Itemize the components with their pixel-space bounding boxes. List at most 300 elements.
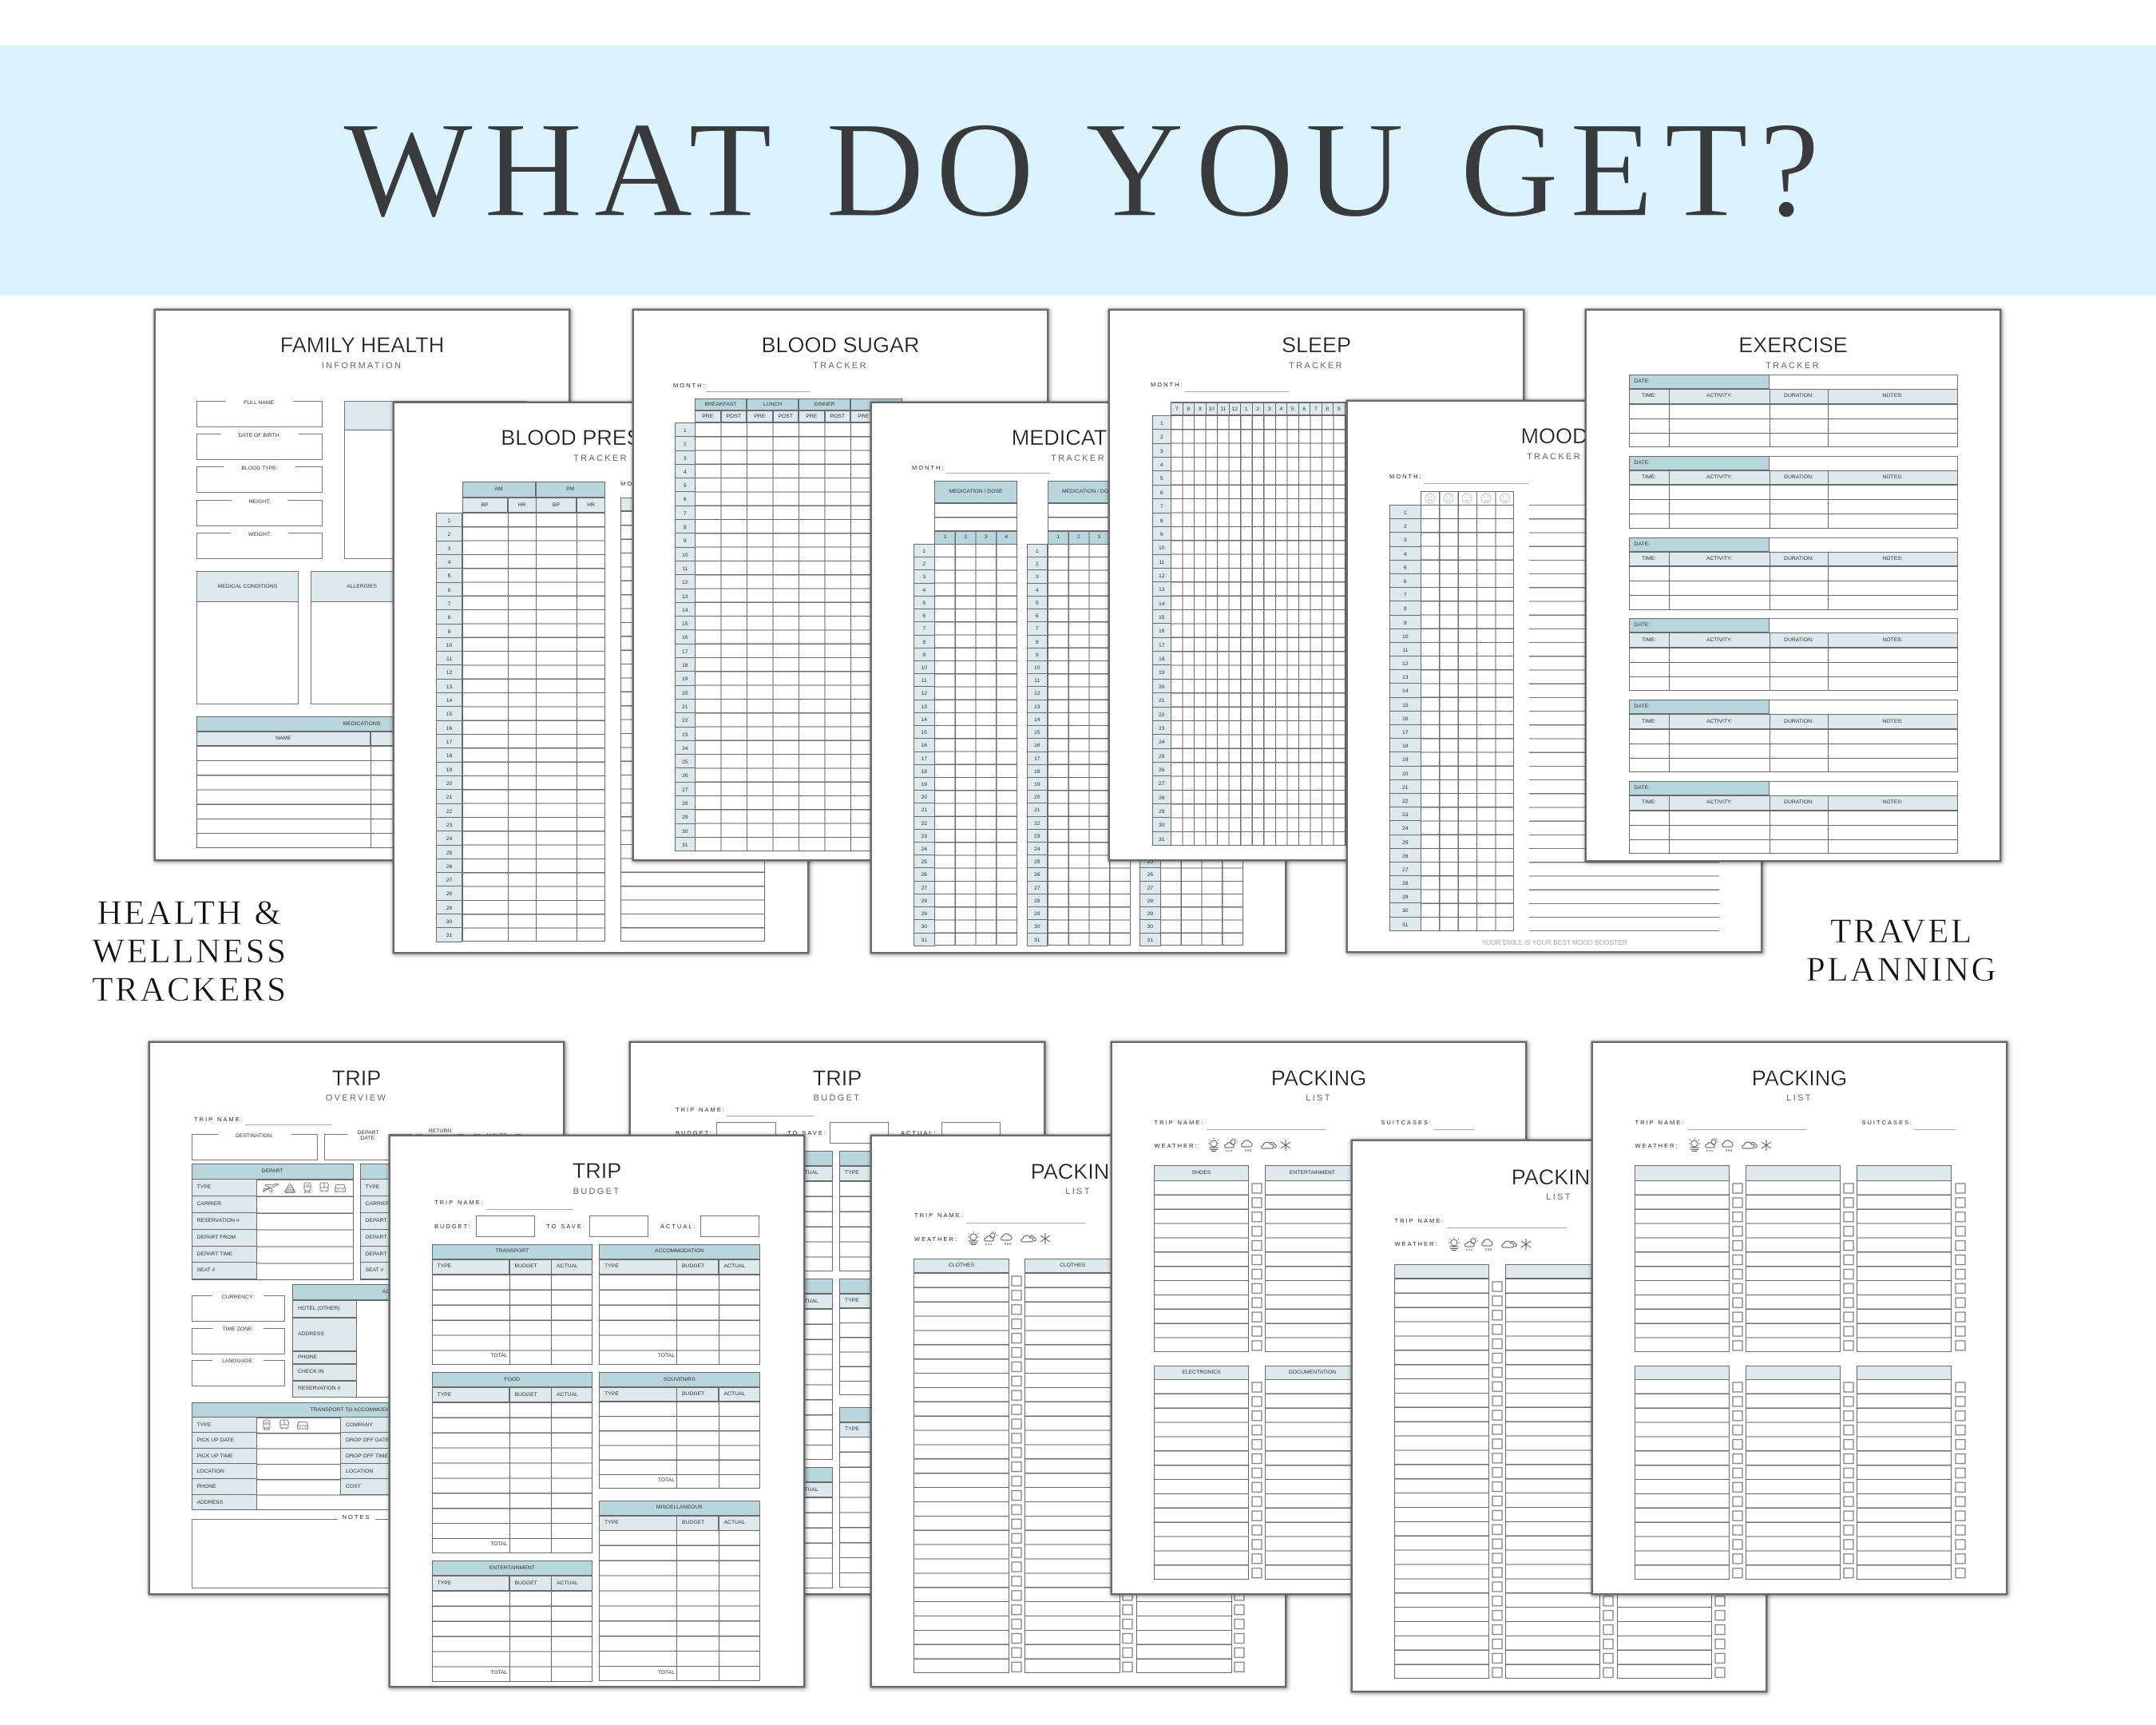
heading: TRIP — [332, 1066, 381, 1090]
label: trip name: TRIP NAME: — [1155, 1119, 1204, 1126]
footer quote: YOUR SMILE IS YOUR BEST MOOD BOOSTER — [1481, 938, 1627, 946]
table: entertainment: TOTAL — [490, 1670, 508, 1675]
table: food — [677, 1279, 833, 1460]
field: height: HEIGHT: — [249, 498, 270, 505]
table: transport: TOTAL — [490, 1353, 508, 1358]
table: sleep grid: 5 — [1291, 406, 1294, 412]
table: blood pressure log: 29 — [446, 906, 452, 911]
table: medication block 2: 26 — [1034, 872, 1040, 878]
table: medication block 1: 3 — [985, 534, 988, 540]
table: transport: TYPE — [677, 1170, 692, 1176]
panel: packing list blank long — [1353, 1141, 1766, 1691]
table: exercise block 4: TIME: — [1642, 637, 1656, 643]
table: miscellaneous: TYPE — [604, 1520, 619, 1525]
table: blood pressure log: 9 — [448, 629, 450, 634]
subheading: INFORMATION — [322, 361, 402, 371]
table: transport to accommodation: COMPANY — [346, 1422, 373, 1428]
subheading: TRACKER — [813, 361, 868, 371]
table: blood sugar log: 30 — [682, 829, 688, 835]
table: medication block 2: 21 — [1034, 807, 1040, 813]
field: depart date: DATE: — [360, 1136, 376, 1141]
table: exercise block 1 — [1629, 375, 1958, 447]
table: blood sugar log: 19 — [682, 676, 688, 682]
table: miscellaneous: MISCELLANEOUS — [897, 1411, 943, 1417]
table: medication block 3: 4 — [1231, 534, 1234, 540]
table: mood grid: 28 — [1402, 881, 1409, 886]
table: souvenirs: ACTUAL — [965, 1298, 985, 1303]
table: medication block 2: 22 — [1034, 821, 1040, 827]
table: medication block 3: 31 — [1147, 938, 1153, 943]
table: blood pressure log: PM — [566, 486, 574, 492]
table: sleep grid: 28 — [1159, 795, 1165, 801]
table: souvenirs: SOUVENIRS — [664, 1377, 696, 1382]
side label: health and wellness trackers: WELLNESS — [92, 933, 288, 970]
table: blood sugar log: 23 — [682, 732, 688, 738]
list: documentation — [1265, 1366, 1373, 1580]
table: return: SEAT # — [366, 1267, 383, 1273]
table: accommodation: ACCOMMODATION — [382, 1289, 431, 1295]
table: medication block 2: 3 — [1036, 574, 1039, 580]
table: blood sugar log: 16 — [682, 635, 688, 640]
table: sleep grid: 6 — [1302, 406, 1306, 412]
field: destination: DESTINATION: — [236, 1132, 273, 1139]
table: blood sugar log: 15 — [682, 621, 688, 627]
table: sleep grid: 22 — [1159, 712, 1165, 718]
table: medication block 3: 17 — [1147, 755, 1153, 762]
table: souvenirs: TYPE — [604, 1391, 619, 1397]
table: mood grid: 16 — [1402, 716, 1409, 722]
label: to save: TO SAVE: — [546, 1222, 586, 1230]
table: medication block 2: 27 — [1034, 886, 1040, 891]
list: top column 2 — [1746, 1165, 1853, 1352]
panel: blood pressure tracker — [394, 403, 807, 952]
table: medications: MEDICATIONS — [343, 721, 380, 727]
table: accommodation: PHONE — [298, 1354, 317, 1360]
table: souvenirs: TOTAL — [658, 1477, 675, 1483]
table: transport to accommodation: LOCATION — [196, 1469, 224, 1474]
table: transport to accommodation: DROP OFF TIME — [346, 1453, 388, 1459]
table: sleep grid: 7 — [1160, 504, 1163, 510]
table: mood grid: 12 — [1402, 661, 1409, 667]
table: transport to accommodation: TYPE — [196, 1422, 211, 1428]
table: return: CARRIER — [366, 1201, 390, 1207]
table: blood sugar log — [675, 399, 902, 851]
table: food: TYPE — [438, 1392, 451, 1398]
label: month: MONTH: — [912, 464, 945, 471]
table: blood pressure log: 16 — [446, 726, 452, 732]
table: blood sugar log: 12 — [682, 580, 688, 585]
table: medication block 2: 14 — [1034, 717, 1040, 723]
table: medication block 1: 13 — [921, 704, 927, 710]
suitcases underline — [1433, 1129, 1475, 1130]
table: medication block 3: 9 — [1148, 652, 1151, 658]
table: blood sugar log: 18 — [682, 663, 688, 668]
list: bottom column 1 — [1635, 1366, 1742, 1580]
table: blood sugar log: 31 — [682, 843, 688, 848]
table: blood sugar log: 21 — [682, 704, 688, 710]
trip name underline — [1447, 1227, 1567, 1228]
table: blood sugar log: POST — [778, 414, 793, 419]
table: medication block 1: 17 — [921, 755, 927, 762]
icons: weather — [968, 1231, 1051, 1245]
subheading: LIST — [1786, 1093, 1813, 1103]
list column 2: CLOTHES — [1060, 1263, 1085, 1268]
table: blood sugar log: 25 — [682, 759, 688, 765]
box: to save — [589, 1215, 648, 1237]
table: souvenirs — [839, 1279, 985, 1395]
table: return: DEPART TIME — [366, 1251, 401, 1257]
table: exercise block 4 — [1629, 618, 1958, 691]
table: medication block 3: 1 — [1170, 534, 1173, 540]
table: blood pressure log: 3 — [448, 546, 450, 552]
table: transport to accommodation: PICK UP TIME — [196, 1453, 233, 1459]
table: sleep grid: 27 — [1159, 781, 1165, 787]
field: time zone: TIME ZONE: — [223, 1326, 253, 1332]
table: sleep grid: 7 — [1175, 406, 1179, 412]
table: medication block 2: 2 — [1036, 561, 1039, 567]
table: mood grid: 15 — [1402, 703, 1409, 708]
table: transport: TRANSPORT — [495, 1248, 529, 1254]
field: return — [416, 1134, 464, 1160]
table: medication block 2 — [1027, 481, 1131, 946]
table: medication block 1: 22 — [921, 821, 927, 827]
table: entertainment: BUDGET — [514, 1580, 537, 1586]
list: electronics — [1154, 1366, 1262, 1580]
table: sleep grid: 24 — [1159, 740, 1165, 745]
table: medication block 2: 4 — [1118, 534, 1121, 540]
field: language: LANGUAGE: — [222, 1358, 254, 1364]
table: entertainment: BUDGET — [755, 1487, 778, 1493]
panel: trip budget (front) — [390, 1136, 803, 1686]
field: date of birth — [196, 434, 323, 460]
table: blood sugar log: 27 — [682, 787, 688, 793]
table: depart: CARRIER — [196, 1201, 221, 1207]
table: medication block 2: 23 — [1034, 834, 1040, 839]
table: exercise block 4: ACTIVITY: — [1706, 637, 1732, 643]
table: miscellaneous: ACTUAL — [965, 1426, 985, 1432]
table: return: TYPE — [366, 1184, 379, 1190]
table: sleep grid: 8 — [1187, 406, 1190, 412]
table: sleep grid: 21 — [1159, 698, 1165, 704]
panel: exercise tracker — [1587, 311, 1999, 860]
table: accommodation: ACCOMMODATION — [895, 1155, 944, 1160]
label: trip name: TRIP NAME: — [194, 1116, 244, 1123]
table: transport — [677, 1151, 833, 1271]
table: blood pressure log: 2 — [448, 532, 450, 537]
table: blood sugar log: 14 — [682, 608, 688, 613]
table: transport: TOTAL — [731, 1259, 747, 1265]
label: month: MONTH: — [1151, 381, 1184, 388]
field: destination — [192, 1134, 318, 1160]
table: mood grid: 13 — [1402, 675, 1409, 680]
table: medication block 2: 19 — [1034, 782, 1040, 787]
table: medication block 2: 20 — [1034, 795, 1040, 800]
table: medication block 1: 2 — [964, 534, 967, 540]
table: blood sugar log: 13 — [682, 594, 688, 600]
table: exercise block 3: TIME: — [1642, 556, 1656, 561]
table: accommodation — [839, 1151, 985, 1271]
field: language — [192, 1359, 284, 1386]
month underline — [946, 473, 1050, 474]
panel: packing list categories — [1112, 1043, 1525, 1593]
table: medication block 3: 2 — [1190, 534, 1193, 540]
panel: trip overview: RETURN — [429, 1128, 451, 1134]
panel: packing list blank sections — [1593, 1043, 2006, 1593]
table: exercise block 6 — [1629, 781, 1958, 854]
box: allergies: ALLERGIES — [347, 584, 377, 589]
table: blood pressure log: AM — [494, 486, 503, 492]
table: blood sugar log: 5 — [684, 483, 687, 489]
table: blood pressure log: 14 — [446, 698, 452, 704]
heading: MEDICATION — [1012, 426, 1145, 450]
table: transport to accommodation: COST — [346, 1484, 361, 1489]
table: miscellaneous: ACTUAL — [723, 1520, 745, 1525]
table: exercise block 3: NOTES: — [1882, 556, 1903, 561]
panel: blood sugar tracker — [634, 311, 1047, 859]
table: medication block 2: 25 — [1034, 859, 1040, 865]
table: mood grid: 21 — [1402, 785, 1409, 791]
table: medication block 2: 15 — [1034, 730, 1040, 736]
box: notes — [192, 1519, 522, 1588]
table: medication block 1: 29 — [921, 911, 927, 917]
table: blood sugar log: POST — [830, 414, 845, 419]
table: medication block 2: 28 — [1034, 898, 1040, 904]
label: weather: WEATHER: — [914, 1235, 958, 1243]
table: exercise block 1: DATE: — [1634, 379, 1650, 384]
table: medication block 1: 21 — [921, 807, 927, 813]
table: blood pressure log: 17 — [446, 740, 452, 745]
panel: trip overview: DEPART — [358, 1130, 378, 1136]
table: transport: TRANSPORT — [735, 1155, 769, 1160]
table: mood grid: 25 — [1402, 840, 1409, 845]
table: blood pressure log: 6 — [448, 588, 450, 593]
table: food: FOOD — [504, 1377, 520, 1382]
table: blood pressure log: 31 — [446, 933, 452, 938]
table: medication block 3: 18 — [1147, 769, 1153, 775]
table: medication block 2: 12 — [1034, 691, 1040, 696]
table: medication block 1: 20 — [921, 795, 927, 800]
side label: health and wellness trackers: HEALTH & — [97, 894, 283, 932]
table: blood pressure log: 1 — [448, 518, 450, 524]
table: accommodation: BUDGET — [922, 1170, 945, 1176]
table: sleep grid: 12 — [1159, 573, 1165, 579]
table: medication block 3: 7 — [1148, 626, 1151, 632]
table: accommodation: TOTAL — [898, 1259, 915, 1265]
table: medication block 3: MEDICATION / DOSE — [1175, 489, 1229, 494]
icons: weather — [1447, 1236, 1535, 1252]
table: sleep grid: 19 — [1159, 670, 1165, 676]
subheading: TRACKER — [1766, 361, 1821, 371]
side label: travel planning — [1806, 913, 1998, 989]
table: accommodation — [292, 1284, 431, 1398]
table: miscellaneous — [839, 1407, 985, 1588]
box: actual — [700, 1215, 759, 1237]
table: blood sugar log: LUNCH — [763, 402, 782, 407]
table: mood grid: 8 — [1404, 606, 1407, 612]
table: exercise block 2: ACTIVITY: — [1706, 474, 1732, 480]
table: medication block 2: 24 — [1034, 847, 1040, 852]
table: food: ACTUAL — [557, 1392, 578, 1398]
table: medication block 3: 27 — [1147, 886, 1153, 891]
table: medication block 1: 27 — [921, 886, 927, 891]
table: mood grid: 26 — [1402, 854, 1409, 859]
table: sleep grid: 7 — [1314, 406, 1318, 412]
table: mood grid: 9 — [1404, 620, 1407, 626]
table: sleep grid: 10 — [1208, 406, 1215, 412]
table: exercise block 5: NOTES: — [1882, 719, 1903, 724]
table: blood pressure log: 11 — [446, 656, 452, 662]
table: exercise block 2 — [1629, 456, 1958, 529]
table: blood pressure log: 7 — [448, 601, 450, 607]
table: blood sugar log: 20 — [682, 691, 688, 696]
subheading: LIST — [1306, 1093, 1332, 1103]
table: entertainment: ACTUAL — [797, 1487, 818, 1493]
table: medication block 3: 4 — [1148, 588, 1151, 593]
table: transport: ACTUAL — [557, 1263, 578, 1269]
table: exercise block 3: DURATION: — [1784, 556, 1813, 561]
table: medication block 3: 24 — [1147, 847, 1153, 852]
table: medication block 3: 3 — [1211, 534, 1214, 540]
table: sleep grid: 2 — [1395, 406, 1398, 412]
box: medical conditions — [196, 571, 299, 704]
table: sleep grid: 4 — [1279, 406, 1282, 412]
label: trip name: TRIP NAME: — [914, 1211, 965, 1219]
table: blood sugar log: PRE — [702, 414, 713, 419]
table: medication block 2: 3 — [1097, 534, 1100, 540]
icons: transport types — [262, 1182, 346, 1193]
table: blood pressure log: HR — [587, 502, 595, 508]
table: medication block 1: 12 — [921, 691, 927, 696]
table: depart: DEPART TIME — [196, 1251, 232, 1257]
panel: trip budget (back) — [631, 1043, 1044, 1593]
list: entertainment: ENTERTAINMENT — [1290, 1170, 1335, 1176]
suitcases underline — [1913, 1129, 1956, 1130]
table: exercise block 5 — [1629, 700, 1958, 772]
table: medication block 2: 13 — [1034, 704, 1040, 710]
trip name underline — [1206, 1129, 1326, 1130]
table: blood pressure log: 25 — [446, 850, 452, 856]
table: sleep grid: 9 — [1338, 406, 1341, 412]
table: medication block 3: 14 — [1147, 717, 1153, 723]
table: sleep grid: 11 — [1220, 406, 1226, 412]
table: mood grid: 29 — [1402, 894, 1409, 900]
table: food: TYPE — [677, 1299, 692, 1304]
table: transport to accommodation: PHONE — [196, 1484, 216, 1489]
table: transport: BUDGET — [514, 1263, 537, 1269]
table: depart: RESERVATION # — [196, 1218, 240, 1223]
month underline — [706, 391, 810, 392]
field: date of birth: DATE OF BIRTH: — [238, 433, 281, 438]
field: height — [196, 500, 323, 526]
table: medication block 1: 25 — [921, 859, 927, 865]
table: entertainment: ACTUAL — [557, 1580, 578, 1586]
table: blood sugar log: 6 — [684, 497, 687, 502]
table: medication block 3: 8 — [1148, 640, 1151, 645]
list column 1 — [1394, 1264, 1502, 1679]
table: sleep grid: 10 — [1347, 406, 1353, 412]
table: exercise block 2: NOTES: — [1882, 474, 1903, 480]
table: medication block 3: 23 — [1147, 834, 1153, 839]
table: medication block 1: 24 — [921, 847, 927, 852]
table: blood pressure log: 24 — [446, 836, 452, 842]
table: blood sugar log: 8 — [684, 525, 687, 530]
table: blood pressure log: 22 — [446, 809, 452, 815]
list: bottom column 3 — [1857, 1366, 1966, 1580]
table: souvenirs — [599, 1372, 760, 1489]
table: sleep grid: 3 — [1268, 406, 1271, 412]
table: blood sugar log: 22 — [682, 718, 688, 724]
table: sleep grid: 4 — [1160, 462, 1163, 468]
table: souvenirs: BUDGET — [682, 1391, 704, 1397]
table: accommodation: HOTEL (OTHER) — [298, 1306, 340, 1311]
table: medication block 3: 6 — [1148, 613, 1151, 619]
table: sleep grid: 4 — [1418, 406, 1421, 412]
table: blood pressure log: BP — [553, 502, 560, 508]
panel: packing list clothes — [872, 1136, 1285, 1686]
icons: weather — [1207, 1137, 1294, 1153]
table: transport to accommodation: PICK UP DATE — [196, 1438, 234, 1443]
table: transport to accommodation: ADDRESS — [196, 1500, 223, 1505]
subheading: TRACKER — [1051, 454, 1106, 463]
field: time zone — [192, 1327, 284, 1354]
table: mood grid: 11 — [1402, 648, 1408, 653]
table: medication block 3: 10 — [1147, 665, 1153, 671]
table: medication block 1: 14 — [921, 717, 927, 723]
table: exercise block 6: DURATION: — [1784, 799, 1813, 805]
table: blood sugar log: PRE — [806, 414, 817, 419]
table: exercise block 1: NOTES: — [1882, 393, 1903, 399]
table: medication block 1: 23 — [921, 834, 927, 839]
table: medication block 3: 13 — [1147, 704, 1153, 710]
label: month: MONTH: — [620, 480, 654, 487]
list: top column 3 — [1857, 1165, 1966, 1352]
header band — [0, 46, 2156, 295]
table: sleep grid: 14 — [1159, 601, 1165, 607]
table: sleep grid: 5 — [1160, 476, 1163, 482]
list column 2 — [1024, 1259, 1133, 1673]
label: weather: WEATHER: — [1155, 1142, 1199, 1148]
box: to save — [830, 1122, 889, 1144]
table: mood grid: 4 — [1404, 552, 1407, 557]
list: electronics: ELECTRONICS — [1182, 1370, 1221, 1375]
table: medication block 2: 8 — [1036, 640, 1039, 645]
panel: mood tracker — [1348, 402, 1761, 951]
field: nights: NIGHTS: — [486, 1132, 509, 1139]
heading: FAMILY HEALTH — [280, 333, 444, 357]
table: exercise block 1: ACTIVITY: — [1706, 393, 1732, 399]
table: food — [432, 1372, 593, 1553]
table: medication block 3: 20 — [1147, 795, 1153, 800]
label: weather: WEATHER: — [1394, 1240, 1439, 1247]
table: exercise block 4: NOTES: — [1882, 637, 1903, 643]
label: weather: WEATHER: — [1635, 1142, 1679, 1148]
subheading: OVERVIEW — [326, 1093, 387, 1103]
table: sleep grid: 3 — [1407, 406, 1410, 412]
panel: trip overview: NOTES — [343, 1513, 371, 1521]
box: actual — [941, 1122, 1001, 1144]
table: mood grid: 30 — [1402, 908, 1409, 914]
table: souvenirs: SOUVENIRS — [904, 1283, 936, 1289]
table: blood sugar log: 11 — [682, 566, 688, 572]
table: souvenirs: TOTAL — [898, 1384, 915, 1390]
side label: travel planning: TRAVEL — [1830, 913, 1974, 950]
table: depart: DEPART — [262, 1168, 283, 1174]
table: blood sugar log: 9 — [684, 538, 687, 544]
table: mood grid: 17 — [1402, 730, 1409, 736]
table: medication block 3: 28 — [1147, 898, 1153, 904]
field: currency — [192, 1295, 284, 1322]
table: miscellaneous: BUDGET — [922, 1426, 945, 1432]
